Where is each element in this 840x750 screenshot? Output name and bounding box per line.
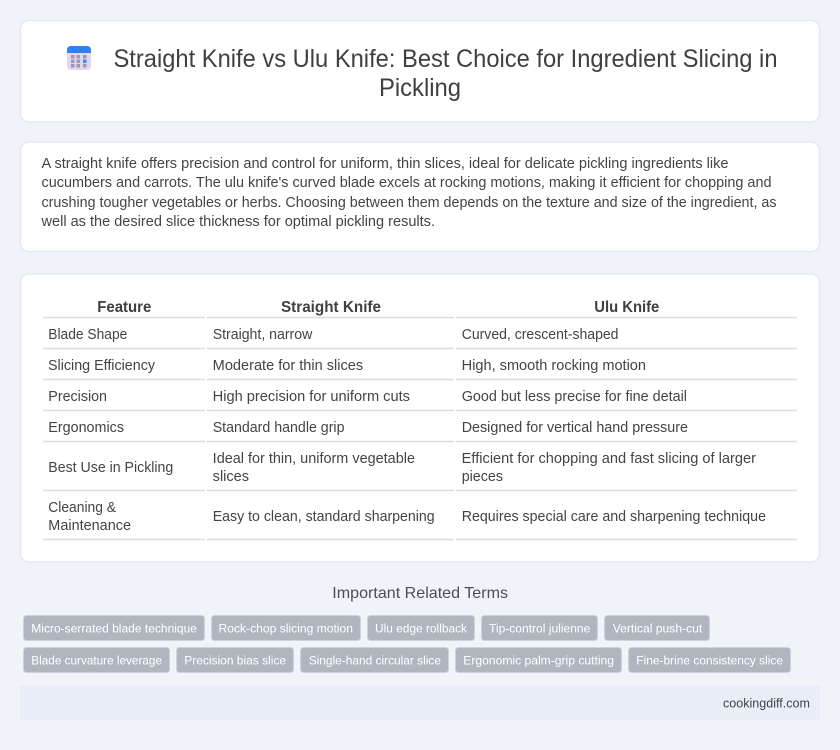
row: blade shape: Curved, crescent-shaped (462, 327, 618, 343)
chip: ulu edge rollback: Ulu edge rollback (375, 621, 468, 635)
chip: micro-serrated blade technique: Micro-serrated blade technique (31, 621, 197, 635)
row: cleaning and maintenance (48, 500, 766, 534)
row: precision: Good but less precise for fine detail (462, 389, 687, 405)
row: cleaning and maintenance: Requires special care and sharpening technique (462, 509, 766, 525)
chip: blade curvature leverage (24, 648, 170, 672)
text block: introduction: cucumbers and carrots. The ulu knife's curved blade excels at rocking motions, making it efficient for chopping and (42, 175, 772, 191)
chip: precision bias slice: Precision bias slice (184, 653, 286, 667)
row: cleaning and maintenance: Easy to clean, standard sharpening (213, 509, 435, 525)
chip: vertical push-cut (604, 616, 710, 640)
panel: comparison table (20, 274, 820, 562)
chip: ergonomic palm-grip cutting: Ergonomic palm-grip cutting (463, 653, 614, 667)
footer credit: cookingdiff.com (723, 695, 810, 710)
row: precision: Precision (48, 389, 107, 405)
text block: introduction (40, 156, 777, 230)
title (114, 45, 778, 102)
row: precision (48, 389, 687, 405)
row: slicing efficiency: Slicing Efficiency (48, 358, 156, 374)
table header: Ulu Knife (594, 299, 660, 316)
chip: ergonomic palm-grip cutting (456, 648, 622, 672)
table header: Feature (97, 299, 152, 316)
row: ergonomics: Standard handle grip (213, 420, 344, 436)
row: blade shape: Blade Shape (48, 327, 127, 343)
panel: header (20, 20, 820, 122)
panel: introduction (20, 142, 820, 252)
chip: rock-chop slicing motion (212, 616, 360, 640)
text block: introduction: well as the desired slice thickness for optimal pickling results. (40, 214, 435, 230)
chip: vertical push-cut: Vertical push-cut (613, 621, 703, 635)
row: best use in pickling: Ideal for thin, uniform vegetable (213, 451, 415, 467)
chip: micro-serrated blade technique (24, 616, 204, 640)
row: slicing efficiency (48, 358, 646, 374)
text block: introduction: crushing tougher vegetables or herbs. Choosing between them depends on the texture and size of the ingredient, as (42, 195, 776, 211)
table header: Straight Knife (281, 299, 381, 316)
row: slicing efficiency: High, smooth rocking motion (462, 358, 646, 374)
chip: precision bias slice (176, 648, 294, 672)
row: best use in pickling: Efficient for chopping and fast slicing of larger (462, 451, 756, 467)
chip: blade curvature leverage: Blade curvature leverage (31, 653, 162, 667)
chip: fine-brine consistency slice (628, 648, 790, 672)
row: best use in pickling: Best Use in Pickling (48, 460, 173, 476)
heading: important related terms: Important Related Terms (332, 585, 508, 602)
icon: calendar (67, 46, 91, 70)
row: blade shape: Straight, narrow (213, 327, 313, 343)
chip: tip-control julienne (482, 616, 598, 640)
chip: fine-brine consistency slice: Fine-brine consistency slice (636, 653, 783, 667)
row: best use in pickling: slices (213, 469, 249, 485)
chip: ulu edge rollback (368, 616, 474, 640)
row: cleaning and maintenance: Maintenance (48, 518, 131, 534)
row: ergonomics: Designed for vertical hand pressure (462, 420, 688, 436)
chip: single-hand circular slice (300, 648, 448, 672)
text block: introduction: A straight knife offers precision and control for uniform, thin slices, ideal for delicate pickling ingredients like (42, 156, 728, 172)
footer (20, 686, 820, 720)
row: precision: High precision for uniform cuts (213, 389, 410, 405)
row: slicing efficiency: Moderate for thin slices (213, 358, 363, 374)
related term chips (24, 616, 790, 672)
row: ergonomics: Ergonomics (48, 420, 124, 436)
row: blade shape (48, 327, 619, 343)
row: best use in pickling (48, 451, 756, 485)
row: ergonomics (48, 420, 688, 436)
title: Pickling (379, 74, 461, 102)
row: cleaning and maintenance: Cleaning & (48, 500, 116, 516)
row: best use in pickling: pieces (462, 469, 503, 485)
title: Straight Knife vs Ulu Knife: Best Choice for Ingredient Slicing in (114, 45, 778, 73)
chip: rock-chop slicing motion: Rock-chop slicing motion (218, 621, 353, 635)
chip: single-hand circular slice: Single-hand circular slice (309, 653, 441, 667)
table header (97, 299, 660, 316)
chip: tip-control julienne: Tip-control julienne (489, 621, 591, 635)
